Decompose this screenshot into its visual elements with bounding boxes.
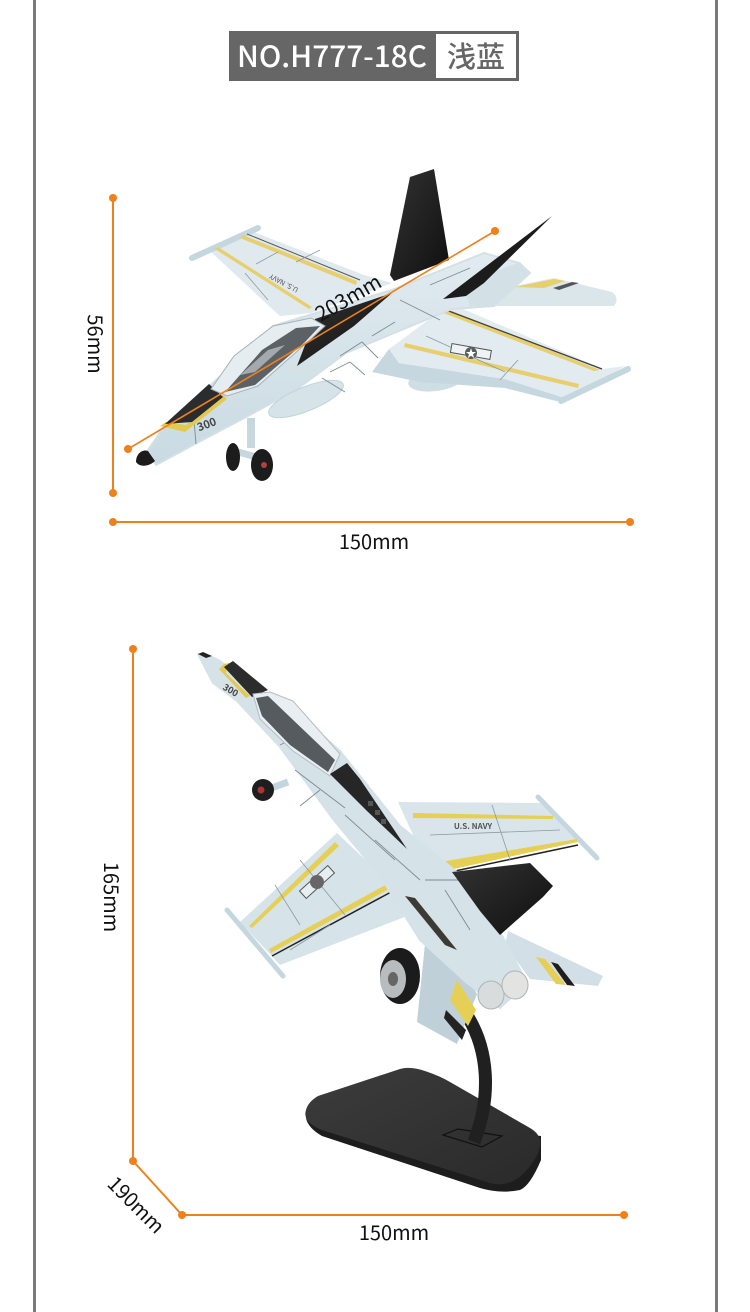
engine housing	[466, 262, 530, 306]
canopy	[253, 692, 340, 776]
fuselage	[198, 654, 527, 1008]
canopy	[211, 318, 325, 396]
black vertical fin	[452, 863, 553, 935]
dimension: 150mm width, top: 150mm	[339, 526, 409, 555]
nose yellow trim	[219, 662, 250, 698]
dimension: 150mm width, top	[109, 518, 634, 555]
far wing: U.S. NAVY	[268, 271, 300, 295]
lower fin	[417, 944, 477, 1044]
jet on display stand	[198, 652, 603, 1192]
display stand arm	[468, 1017, 485, 1142]
nose dark panel	[165, 384, 223, 424]
dimension: 203mm diagonal	[124, 227, 499, 453]
nose yellow trim	[160, 395, 227, 432]
large rear wheel	[380, 948, 420, 1004]
nose cone	[136, 451, 155, 466]
title badge	[229, 31, 519, 81]
display stand base	[305, 1068, 541, 1192]
icon: national insignia	[298, 864, 336, 900]
jet, top-three-quarter view	[136, 169, 628, 481]
tail plane	[505, 931, 603, 986]
fuel tank, rear	[407, 365, 465, 395]
nose cone	[198, 652, 212, 658]
right wing: U.S. NAVY	[454, 821, 493, 832]
thin black near fin	[443, 216, 552, 299]
fuel tank, front	[264, 373, 348, 425]
front landing gear	[226, 418, 273, 481]
front landing gear	[252, 779, 288, 801]
near wing	[372, 306, 628, 402]
dimension: 56mm height	[82, 194, 117, 497]
dimension: 56mm height: 56mm	[82, 314, 111, 374]
right wing	[398, 797, 597, 871]
air intake	[405, 896, 457, 950]
black vertical fin	[390, 169, 449, 281]
title badge: 浅蓝	[447, 34, 505, 76]
title badge: NO.H777-18C	[237, 34, 427, 76]
number 300: 300	[221, 680, 241, 700]
panel lines	[194, 268, 470, 444]
icon: national insignia	[450, 344, 491, 361]
icon: national insignia: ★	[466, 345, 476, 361]
far wing	[192, 228, 392, 316]
dimension: 190mm depth: 190mm	[102, 1169, 172, 1239]
panel lines	[280, 730, 475, 930]
dimension: 165mm height: 165mm	[98, 862, 127, 932]
number 300: 300	[195, 413, 219, 435]
cockpit spine	[297, 293, 392, 366]
engine nozzles	[478, 971, 528, 1009]
dimension: 150mm width, bottom	[182, 1211, 628, 1246]
dimension: 150mm width, bottom: 150mm	[359, 1217, 429, 1246]
fuselage	[148, 253, 530, 465]
left wing	[227, 833, 410, 976]
tail plane	[484, 278, 617, 306]
dimension: 203mm diagonal: 203mm	[309, 265, 386, 327]
nose dark panel	[224, 661, 268, 697]
black cockpit spine	[330, 763, 407, 849]
dimension: 165mm height	[98, 645, 137, 1165]
spine vents	[368, 801, 386, 824]
